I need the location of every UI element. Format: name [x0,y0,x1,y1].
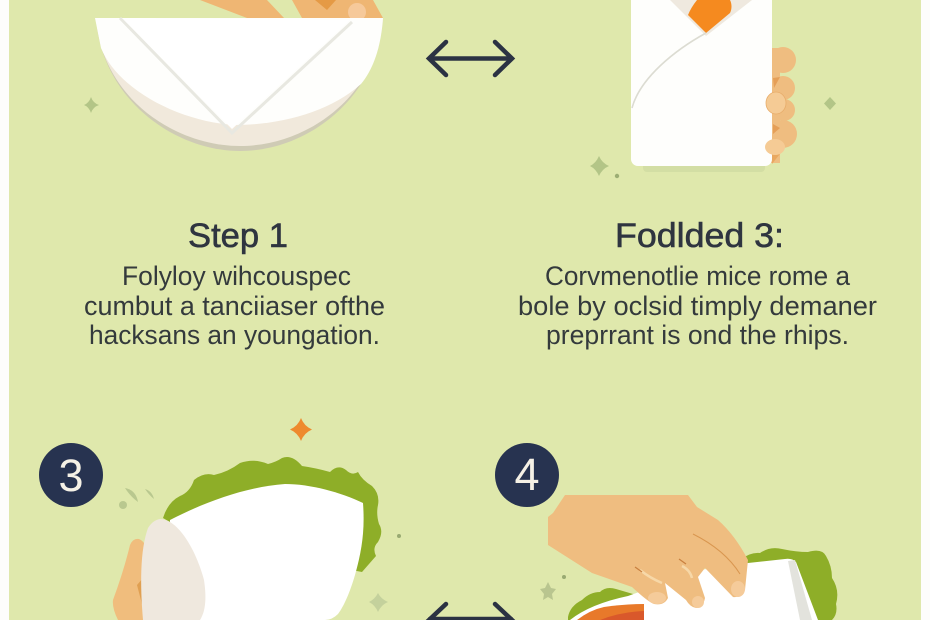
text block: step 1 description: hacksans an youngation. [89,320,380,350]
icon: fingertips [765,77,786,155]
badge: number 3: 3 [58,450,84,501]
heading: step 1: Step 1 [188,217,288,255]
wrap [570,559,818,620]
icon: hand above bowl [200,0,383,21]
text block: step 1 description: cumbut a tanciiaser ofthe [84,291,385,321]
illustration: wrap held in hand, step 3 [113,457,381,620]
text block: folded 3 description: preprrant is ond the rhips. [546,320,849,350]
text block: folded 3 description: bole by oclsid timply demaner [518,291,877,321]
filling [577,604,644,620]
text block: folded 3 description: Corvmenotlie mice rome a [545,261,850,291]
napkin shadow [643,160,765,172]
arrow: bottom double arrow [429,604,512,620]
cream end [141,519,205,620]
lettuce [568,548,837,620]
illustration: wrap held in hand, step 4 [548,495,837,620]
motion marks [119,488,401,612]
badge: number 3 [39,443,103,507]
text block: step 1 description [84,261,385,350]
napkin fold [120,18,352,133]
heading: folded 3: Fodlded 3: [615,217,784,255]
lettuce [163,457,381,572]
illustration: napkin in bowl with hand [95,0,383,151]
sparkles: upper panel [84,97,836,178]
hand [113,539,145,620]
text block: step 1 description: Folyloy wihcouspec [122,261,351,291]
icon: fingers behind napkin [764,47,797,164]
filling strip [670,0,752,36]
napkin body [631,0,772,166]
illustration: folded napkin with hand [631,0,797,172]
badge: number 4 [495,443,559,507]
wrap [170,484,364,620]
sparkle: orange [290,418,312,441]
sparkles: near hand [540,575,566,600]
fold stripe [788,560,812,620]
bowl [95,18,383,151]
text block: folded 3 description [518,261,877,350]
fold curve [632,33,706,108]
arrow: top double arrow [429,42,512,75]
hand [548,495,748,608]
badge: number 4: 4 [514,449,540,500]
